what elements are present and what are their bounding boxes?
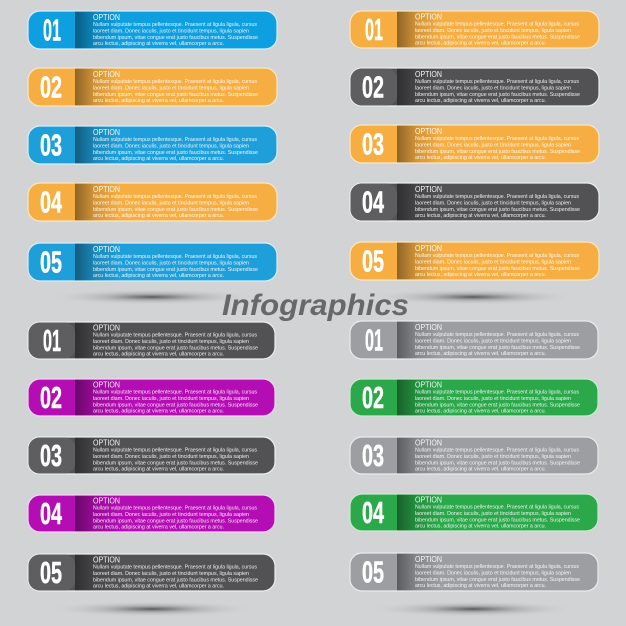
card: right dark 04: OPTION	[415, 184, 442, 194]
card: right orange 05: laoreet diam. Donec iaculis, justo et tincidunt tempus, ligula sapien	[415, 259, 571, 265]
card: left blue 01: arcu lectus, adipiscing at viverra vel, ullamcorper a arcu.	[93, 41, 224, 47]
card: left purple 02: laoreet diam. Donec iaculis, justo et tincidunt tempus, ligula sapien	[93, 396, 249, 402]
card: right dark 02: OPTION	[415, 69, 442, 79]
card: right gray 05: laoreet diam. Donec iaculis, justo et tincidunt tempus, ligula sapien	[415, 570, 571, 576]
card: left dark 03: arcu lectus, adipiscing at viverra vel, ullamcorper a arcu.	[93, 467, 224, 473]
card: right gray 01: 01	[365, 322, 383, 358]
card: right orange 03: arcu lectus, adipiscing at viverra vel, ullamcorper a arcu.	[415, 155, 546, 161]
card: left dark 01: 01	[43, 323, 61, 358]
card: right dark 02: laoreet diam. Donec iaculis, justo et tincidunt tempus, ligula sapien	[415, 85, 571, 91]
card: left blue 01: laoreet diam. Donec iaculis, justo et tincidunt tempus, ligula sapien	[93, 28, 249, 34]
card: right dark 04: 04	[362, 184, 384, 220]
card: left purple 04: 04	[40, 496, 62, 531]
card: left orange 02: bibendum ipsum, vitae congue erat justo faucibus metus. Suspendisse	[93, 92, 258, 98]
card: right orange 01: Nullam vulputate tempus pellentesque. Praesent at ligula ligula, cursus	[415, 22, 579, 28]
card: right orange 03: bibendum ipsum, vitae congue erat justo faucibus metus. Suspendisse	[415, 149, 580, 155]
card: left orange 02	[28, 68, 277, 106]
card: left orange 02: laoreet diam. Donec iaculis, justo et tincidunt tempus, ligula sapien	[93, 85, 249, 91]
card: left orange 04: arcu lectus, adipiscing at viverra vel, ullamcorper a arcu.	[93, 213, 224, 219]
card: left blue 05: 05	[40, 244, 62, 280]
card: right green 04	[350, 494, 598, 531]
card: left blue 03: bibendum ipsum, vitae congue erat justo faucibus metus. Suspendisse	[93, 150, 258, 156]
card: left purple 04: OPTION	[93, 496, 120, 506]
card: right gray 01: laoreet diam. Donec iaculis, justo et tincidunt tempus, ligula sapien	[415, 338, 571, 344]
card: left orange 02: Nullam vulputate tempus pellentesque. Praesent at ligula ligula, cursus	[93, 79, 257, 85]
card: right green 02: OPTION	[415, 380, 442, 390]
card: right dark 04: Nullam vulputate tempus pellentesque. Praesent at ligula ligula, cursus	[415, 194, 579, 200]
card: right gray 05: 05	[362, 554, 384, 590]
card: left blue 03: 03	[40, 128, 62, 162]
card: right gray 03: laoreet diam. Donec iaculis, justo et tincidunt tempus, ligula sapien	[415, 454, 571, 460]
card: right green 04: arcu lectus, adipiscing at viverra vel, ullamcorper a arcu.	[415, 524, 546, 530]
card: left orange 04: laoreet diam. Donec iaculis, justo et tincidunt tempus, ligula sapien	[93, 200, 249, 206]
card: left dark 05	[28, 554, 275, 591]
shadow: lower right	[368, 601, 578, 617]
card: left orange 04: bibendum ipsum, vitae congue erat justo faucibus metus. Suspendisse	[93, 207, 258, 213]
card: right green 04: Nullam vulputate tempus pellentesque. Praesent at ligula ligula, cursus	[415, 505, 579, 511]
card: left blue 01: bibendum ipsum, vitae congue erat justo faucibus metus. Suspendisse	[93, 35, 258, 41]
card: right orange 01: OPTION	[415, 12, 442, 22]
card: left blue 03: arcu lectus, adipiscing at viverra vel, ullamcorper a arcu.	[93, 156, 224, 162]
card: left blue 03: Nullam vulputate tempus pellentesque. Praesent at ligula ligula, cursus	[93, 137, 257, 143]
card: right orange 03: laoreet diam. Donec iaculis, justo et tincidunt tempus, ligula sapien	[415, 142, 571, 148]
card: left purple 02: bibendum ipsum, vitae congue erat justo faucibus metus. Suspendisse	[93, 402, 258, 408]
card: left orange 02: OPTION	[93, 69, 120, 79]
card: left dark 05: OPTION	[93, 554, 120, 564]
card: left purple 02: arcu lectus, adipiscing at viverra vel, ullamcorper a arcu.	[93, 409, 224, 415]
card: right orange 05: OPTION	[415, 243, 442, 253]
card: right orange 03: Nullam vulputate tempus pellentesque. Praesent at ligula ligula, cursus	[415, 136, 579, 142]
card: right green 02: bibendum ipsum, vitae congue erat justo faucibus metus. Suspendisse	[415, 402, 580, 408]
card: right green 02: arcu lectus, adipiscing at viverra vel, ullamcorper a arcu.	[415, 409, 546, 415]
card: left blue 05	[28, 243, 277, 281]
card: left dark 01: Nullam vulputate tempus pellentesque. Praesent at ligula ligula, cursus	[93, 333, 257, 339]
card: left blue 05: Nullam vulputate tempus pellentesque. Praesent at ligula ligula, cursus	[93, 254, 257, 260]
card: right orange 01: laoreet diam. Donec iaculis, justo et tincidunt tempus, ligula sapien	[415, 28, 571, 34]
card: right orange 01: bibendum ipsum, vitae congue erat justo faucibus metus. Suspendisse	[415, 34, 580, 40]
card: right orange 01: 01	[365, 12, 383, 47]
card: left dark 05: Nullam vulputate tempus pellentesque. Praesent at ligula ligula, cursus	[93, 565, 257, 571]
card: right gray 05: OPTION	[415, 554, 442, 564]
card: right orange 01: arcu lectus, adipiscing at viverra vel, ullamcorper a arcu.	[415, 41, 546, 47]
card: right dark 04: bibendum ipsum, vitae congue erat justo faucibus metus. Suspendisse	[415, 207, 580, 213]
card: left dark 05: laoreet diam. Donec iaculis, justo et tincidunt tempus, ligula sapien	[93, 571, 249, 577]
card: left dark 01: arcu lectus, adipiscing at viverra vel, ullamcorper a arcu.	[93, 352, 224, 358]
card: right gray 01: OPTION	[415, 322, 442, 332]
card: right gray 05	[350, 553, 598, 591]
card: left dark 01: laoreet diam. Donec iaculis, justo et tincidunt tempus, ligula sapien	[93, 339, 249, 345]
card: right dark 02: arcu lectus, adipiscing at viverra vel, ullamcorper a arcu.	[415, 98, 546, 104]
card: left blue 01: Nullam vulputate tempus pellentesque. Praesent at ligula ligula, cursus	[93, 22, 257, 28]
card: right gray 03: Nullam vulputate tempus pellentesque. Praesent at ligula ligula, cursus	[415, 448, 579, 454]
card: right gray 03: arcu lectus, adipiscing at viverra vel, ullamcorper a arcu.	[415, 467, 546, 473]
card: right green 02	[350, 379, 598, 416]
card: left blue 01: OPTION	[93, 12, 120, 22]
title: Infographics	[222, 289, 409, 322]
card: left dark 05: bibendum ipsum, vitae congue erat justo faucibus metus. Suspendisse	[93, 577, 258, 583]
card: left blue 05: bibendum ipsum, vitae congue erat justo faucibus metus. Suspendisse	[93, 267, 258, 273]
card: right gray 01: arcu lectus, adipiscing at viverra vel, ullamcorper a arcu.	[415, 351, 546, 357]
card: right orange 05: Nullam vulputate tempus pellentesque. Praesent at ligula ligula, cursus	[415, 253, 579, 259]
shadow: upper left	[47, 289, 257, 305]
card: left blue 01	[28, 11, 277, 49]
card: left dark 01	[28, 322, 275, 359]
card: right gray 03: 03	[362, 438, 384, 473]
card: right green 02: laoreet diam. Donec iaculis, justo et tincidunt tempus, ligula sapien	[415, 396, 571, 402]
card: right orange 05	[350, 242, 599, 280]
card: left blue 01: 01	[43, 12, 61, 48]
card: right orange 03: OPTION	[415, 126, 442, 136]
card: left dark 01: OPTION	[93, 322, 120, 332]
card: left purple 02: Nullam vulputate tempus pellentesque. Praesent at ligula ligula, cursus	[93, 390, 257, 396]
card: right orange 03: 03	[362, 126, 384, 162]
card: left dark 03: Nullam vulputate tempus pellentesque. Praesent at ligula ligula, cursus	[93, 448, 257, 454]
card: left purple 04: Nullam vulputate tempus pellentesque. Praesent at ligula ligula, cursus	[93, 506, 257, 512]
card: right dark 04: laoreet diam. Donec iaculis, justo et tincidunt tempus, ligula sapien	[415, 200, 571, 206]
card: right gray 05: arcu lectus, adipiscing at viverra vel, ullamcorper a arcu.	[415, 583, 546, 589]
card: left dark 03: bibendum ipsum, vitae congue erat justo faucibus metus. Suspendisse	[93, 460, 258, 466]
card: right green 04: bibendum ipsum, vitae congue erat justo faucibus metus. Suspendisse	[415, 517, 580, 523]
card: left purple 02: 02	[40, 380, 62, 415]
card: right green 02: 02	[362, 380, 384, 415]
card: left dark 03: 03	[40, 438, 62, 473]
card: right gray 05: bibendum ipsum, vitae congue erat justo faucibus metus. Suspendisse	[415, 577, 580, 583]
card: left dark 01: bibendum ipsum, vitae congue erat justo faucibus metus. Suspendisse	[93, 345, 258, 351]
card: left blue 03: laoreet diam. Donec iaculis, justo et tincidunt tempus, ligula sapien	[93, 143, 249, 149]
card: right gray 01	[350, 321, 598, 359]
card: right orange 05: bibendum ipsum, vitae congue erat justo faucibus metus. Suspendisse	[415, 266, 580, 272]
card: left purple 02	[28, 379, 275, 416]
card: left dark 05: 05	[40, 555, 62, 590]
card: left dark 05: arcu lectus, adipiscing at viverra vel, ullamcorper a arcu.	[93, 584, 224, 590]
card: left blue 03: OPTION	[93, 127, 120, 137]
card: right gray 03: OPTION	[415, 438, 442, 448]
card: left purple 04	[28, 495, 275, 532]
shadow: lower left	[47, 601, 257, 617]
card: right green 04: laoreet diam. Donec iaculis, justo et tincidunt tempus, ligula sapien	[415, 511, 571, 517]
card: left orange 04	[28, 183, 277, 221]
card: left dark 03: laoreet diam. Donec iaculis, justo et tincidunt tempus, ligula sapien	[93, 454, 249, 460]
card: left dark 03: OPTION	[93, 438, 120, 448]
card: left purple 04: bibendum ipsum, vitae congue erat justo faucibus metus. Suspendisse	[93, 518, 258, 524]
card: right green 04: OPTION	[415, 494, 442, 504]
card: right gray 03: bibendum ipsum, vitae congue erat justo faucibus metus. Suspendisse	[415, 460, 580, 466]
card: right dark 02: bibendum ipsum, vitae congue erat justo faucibus metus. Suspendisse	[415, 92, 580, 98]
card: right orange 03	[350, 125, 599, 163]
card: left orange 04: OPTION	[93, 184, 120, 194]
card: left orange 02: arcu lectus, adipiscing at viverra vel, ullamcorper a arcu.	[93, 98, 224, 104]
card: right dark 02: Nullam vulputate tempus pellentesque. Praesent at ligula ligula, cursus	[415, 79, 579, 85]
card: right dark 04	[350, 183, 599, 221]
card: right orange 05: arcu lectus, adipiscing at viverra vel, ullamcorper a arcu.	[415, 272, 546, 278]
card: right gray 01: bibendum ipsum, vitae congue erat justo faucibus metus. Suspendisse	[415, 345, 580, 351]
card: left blue 05: laoreet diam. Donec iaculis, justo et tincidunt tempus, ligula sapien	[93, 260, 249, 266]
card: left orange 04: Nullam vulputate tempus pellentesque. Praesent at ligula ligula, cursus	[93, 194, 257, 200]
card: right dark 02	[350, 68, 599, 106]
card: right dark 04: arcu lectus, adipiscing at viverra vel, ullamcorper a arcu.	[415, 213, 546, 219]
card: left purple 04: laoreet diam. Donec iaculis, justo et tincidunt tempus, ligula sapien	[93, 512, 249, 518]
card: left purple 02: OPTION	[93, 380, 120, 390]
shadow: upper right	[368, 289, 578, 305]
card: right gray 01: Nullam vulputate tempus pellentesque. Praesent at ligula ligula, cursus	[415, 332, 579, 338]
card: left blue 05: OPTION	[93, 244, 120, 254]
card: left blue 05: arcu lectus, adipiscing at viverra vel, ullamcorper a arcu.	[93, 273, 224, 279]
card: right green 02: Nullam vulputate tempus pellentesque. Praesent at ligula ligula, cursus	[415, 390, 579, 396]
card: right orange 05: 05	[362, 244, 384, 278]
card: right gray 03	[350, 437, 598, 474]
card: right green 04: 04	[362, 495, 384, 530]
card: left dark 03	[28, 437, 275, 474]
card: right dark 02: 02	[362, 70, 384, 104]
card: right orange 01	[350, 11, 599, 48]
card: left orange 02: 02	[40, 70, 62, 104]
card: left orange 04: 04	[40, 184, 62, 220]
card: right gray 05: Nullam vulputate tempus pellentesque. Praesent at ligula ligula, cursus	[415, 564, 579, 570]
card: left blue 03	[28, 126, 277, 164]
card: left purple 04: arcu lectus, adipiscing at viverra vel, ullamcorper a arcu.	[93, 525, 224, 531]
